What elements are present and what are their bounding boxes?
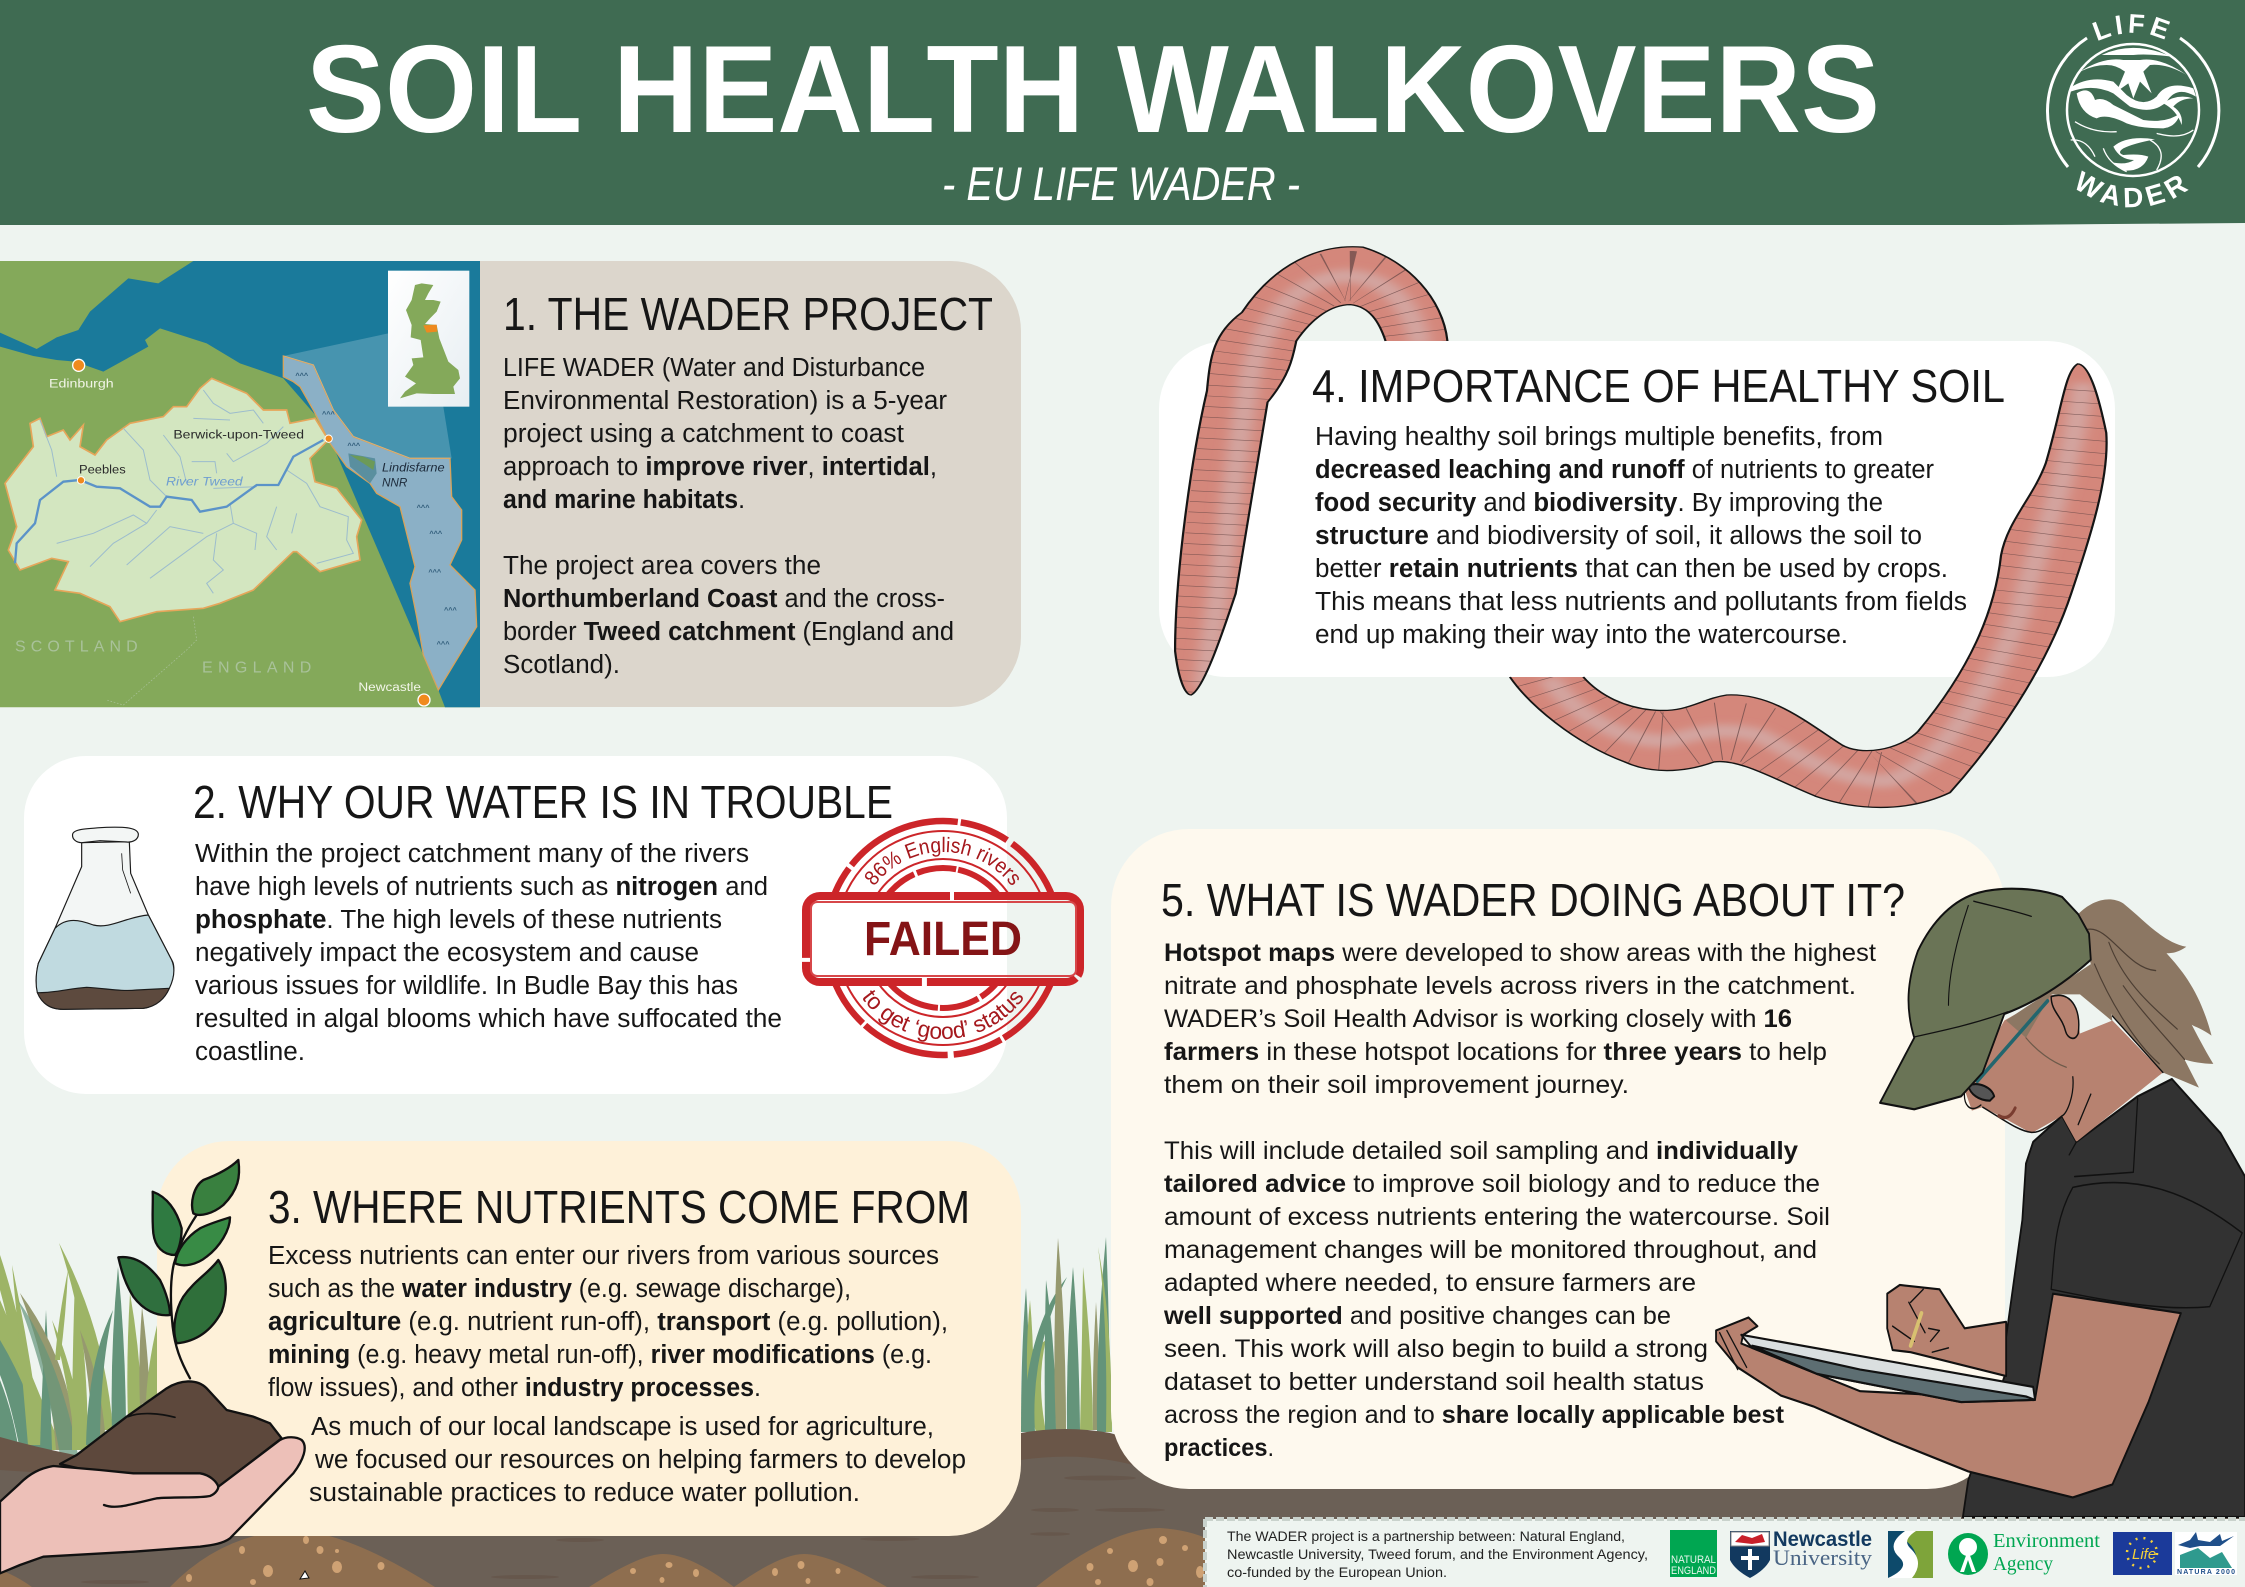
grass behind left panel [0, 1243, 160, 1455]
logo: Natural England [1670, 1530, 1717, 1577]
body text 5: Hotspot maps were developed to show areas with the highest [1164, 939, 1876, 967]
map labels: Berwick-upon-Tweed [173, 427, 304, 441]
panel 1: the WADER project [480, 261, 1021, 707]
map labels: ENGLAND [202, 659, 311, 676]
body text 2: have high levels of nutrients such as nitrogen and [195, 873, 768, 901]
grass between panels [1021, 1237, 1112, 1432]
map labels: ^^^ [417, 503, 430, 512]
map labels: SCOTLAND [15, 639, 138, 656]
body text 4: better retain nutrients that can then be used by crops. [1315, 555, 1948, 583]
River Tweed [15, 440, 323, 563]
partnership statement [1227, 1529, 1648, 1580]
coastal zone [283, 356, 477, 690]
worm left section [1174, 246, 1448, 696]
body text 1: project using a catchment to coast [503, 420, 904, 448]
body text 5: This will include detailed soil sampling and individually [1164, 1137, 1798, 1165]
heading 4: 4. IMPORTANCE OF HEALTHY SOIL [1312, 360, 2005, 412]
body text 5: practices. [1164, 1434, 1274, 1462]
partnership statement: The WADER project is a partnership between: Natural England, [1227, 1529, 1625, 1544]
clipboard [1741, 1335, 2035, 1402]
body text 4: Having healthy soil brings multiple benefits, from [1315, 423, 1883, 451]
logo: LIFE WADER: LIFE [2092, 14, 2170, 41]
heading 2: 2. WHY OUR WATER IS IN TROUBLE [193, 776, 893, 828]
stamp: failed: FAILED [864, 913, 1022, 966]
body text 5: WADER’s Soil Health Advisor is working closely with 16 [1164, 1005, 1792, 1033]
logo: EU Life [2113, 1532, 2172, 1575]
worm right section [1497, 356, 2122, 816]
body text 1 [503, 354, 954, 679]
emblem artwork [2071, 48, 2196, 172]
map labels: NNR [382, 476, 408, 490]
map labels [15, 359, 458, 706]
catchment [5, 378, 362, 622]
partnership statement: co-funded by the European Union. [1227, 1565, 1447, 1580]
map labels: ^^^ [429, 529, 443, 538]
soil mounds with stones [0, 1528, 1210, 1587]
tributaries [40, 390, 353, 593]
heading 3: 3. WHERE NUTRIENTS COME FROM [268, 1181, 970, 1233]
body text 1: Scotland). [503, 651, 620, 679]
body text 2: resulted in algal blooms which have suffocated the [195, 1005, 782, 1033]
arms and hands [1716, 1294, 2181, 1497]
map labels: Peebles [79, 462, 126, 476]
logo: Tweed Forum [1888, 1531, 1933, 1578]
title: SOIL HEALTH WALKOVERS [306, 21, 1880, 159]
body text 3: flow issues), and other industry processes. [268, 1374, 761, 1402]
body text 4 [1315, 423, 1967, 649]
soil ground [0, 1429, 2245, 1587]
body text 2: various issues for wildlife. In Budle Bay this has [195, 972, 738, 1000]
logo: LIFE WADER [2046, 14, 2220, 208]
body text 5: tailored advice to improve soil biology and to reduce the [1164, 1170, 1820, 1198]
logo: EU Life: Life [2132, 1546, 2156, 1563]
logo: Environment Agency [1948, 1530, 2100, 1575]
logo: Natura 2000 [2175, 1532, 2237, 1576]
panel 5: what is WADER doing about it [1111, 829, 2005, 1489]
body text 1: border Tweed catchment (England and [503, 618, 954, 646]
panel 4: importance of healthy soil [1159, 341, 2115, 677]
body text 3: agriculture (e.g. nutrient run-off), transport (e.g. pollution), [268, 1308, 948, 1336]
body text 5 [1163, 939, 1876, 1462]
heading 5: 5. WHAT IS WADER DOING ABOUT IT? [1161, 874, 1905, 926]
illustration: earthworm [1159, 241, 2122, 816]
logo: Newcastle University [1730, 1528, 1872, 1578]
head [1964, 964, 2163, 1142]
body text 5: management changes will be monitored throughout, and [1164, 1236, 1817, 1264]
sea [0, 261, 480, 707]
map labels: ^^^ [295, 371, 309, 380]
map labels: Lindisfarne [382, 461, 445, 475]
illustration: advisor with clipboard [1716, 889, 2245, 1517]
map labels: ^^^ [347, 441, 361, 450]
body text 3: mining (e.g. heavy metal run-off), river modifications (e.g. [268, 1341, 932, 1369]
header band [0, 0, 2245, 225]
body text 1: and marine habitats. [503, 486, 745, 514]
map labels: River Tweed [166, 475, 243, 489]
body text 1: Environmental Restoration) is a 5-year [503, 387, 948, 415]
body text 5: dataset to better understand soil health status [1164, 1368, 1704, 1396]
body text 5: farmers in these hotspot locations for three years to help [1164, 1038, 1827, 1066]
body text 5: nitrate and phosphate levels across rivers in the catchment. [1164, 972, 1856, 1000]
logo: Natural England: NATURAL [1671, 1554, 1716, 1566]
ponytail [2078, 899, 2213, 1088]
seedling [118, 1160, 239, 1378]
sleeve lines [2051, 1099, 2242, 1308]
projection wedge [283, 333, 452, 458]
logo: Natura 2000: NATURA 2000 [2177, 1569, 2235, 1576]
shirt [1963, 1079, 2245, 1517]
body text 3 [268, 1242, 966, 1507]
body text 5: well supported and positive changes can be [1163, 1302, 1671, 1330]
logo: LIFE WADER: WADER [2076, 170, 2189, 208]
stamp: failed: 86% English rivers [864, 836, 1019, 885]
subtitle: - EU LIFE WADER - [942, 157, 1300, 210]
icon: hand holding soil and seedling [0, 1160, 305, 1573]
body text 5: seen. This work will also begin to build a strong [1164, 1335, 1708, 1363]
body text 4: This means that less nutrients and pollutants from fields [1315, 588, 1967, 616]
panel 2: why our water is in trouble [24, 756, 1007, 1094]
body text 2: negatively impact the ecosystem and cause [195, 939, 699, 967]
logo: Natural England: ENGLAND [1671, 1565, 1716, 1577]
body text 5: across the region and to share locally applicable best [1164, 1401, 1785, 1429]
body text 2: phosphate. The high levels of these nutrients [195, 906, 722, 934]
partnership statement: Newcastle University, Tweed forum, and the Environment Agency, [1227, 1547, 1648, 1562]
body text 5: adapted where needed, to ensure farmers are [1164, 1269, 1696, 1297]
body text 3: such as the water industry (e.g. sewage discharge), [268, 1275, 851, 1303]
logo: Environment Agency: Environment [1993, 1530, 2100, 1552]
map labels: ^^^ [428, 567, 442, 576]
body text 3: As much of our local landscape is used for agriculture, [311, 1413, 934, 1441]
body text 2: Within the project catchment many of the rivers [195, 840, 749, 868]
footer partner strip [1205, 1519, 2245, 1587]
body text 3: Excess nutrients can enter our rivers from various sources [268, 1242, 939, 1270]
map labels: ^^^ [322, 410, 336, 419]
map: project area [0, 261, 480, 707]
logo: Newcastle University: Newcastle [1773, 1528, 1872, 1551]
map labels: ^^^ [444, 606, 458, 615]
body text 1: LIFE WADER (Water and Disturbance [503, 354, 925, 382]
soil pile [60, 1381, 282, 1488]
body text 1: The project area covers the [503, 552, 821, 580]
hand [0, 1437, 305, 1573]
map labels: Edinburgh [49, 377, 114, 391]
panel 3: where nutrients come from [157, 1141, 1021, 1536]
logo: Environment Agency: Agency [1993, 1553, 2053, 1575]
body text 2 [195, 840, 782, 1066]
body text 1: approach to improve river, intertidal, [503, 453, 937, 481]
stamp: failed [802, 818, 1084, 1058]
inset UK [388, 271, 469, 407]
body text 3: we focused our resources on helping farmers to develop [314, 1446, 966, 1474]
icon: flask of water and soil [36, 827, 174, 1009]
body text 4: end up making their way into the watercourse. [1315, 621, 1848, 649]
map labels: Newcastle [358, 680, 421, 694]
glasses [1977, 1001, 2048, 1081]
logo: Newcastle University: University [1773, 1545, 1872, 1570]
stamp: failed: to get ‘good’ status [863, 990, 1023, 1042]
map labels: ^^^ [437, 640, 450, 649]
body text 5: them on their soil improvement journey. [1164, 1071, 1629, 1099]
body text 2: coastline. [195, 1038, 305, 1066]
body text 4: decreased leaching and runoff of nutrients to greater [1315, 456, 1934, 484]
heading 1: 1. THE WADER PROJECT [503, 288, 993, 340]
body text 4: structure and biodiversity of soil, it allows the soil to [1315, 522, 1922, 550]
body text 5: amount of excess nutrients entering the watercourse. Soil [1164, 1203, 1830, 1231]
cap [1880, 889, 2091, 1109]
body text 3: sustainable practices to reduce water pollution. [309, 1479, 860, 1507]
body text 4: food security and biodiversity. By improving the [1315, 489, 1883, 517]
body text 1: Northumberland Coast and the cross- [503, 585, 945, 613]
